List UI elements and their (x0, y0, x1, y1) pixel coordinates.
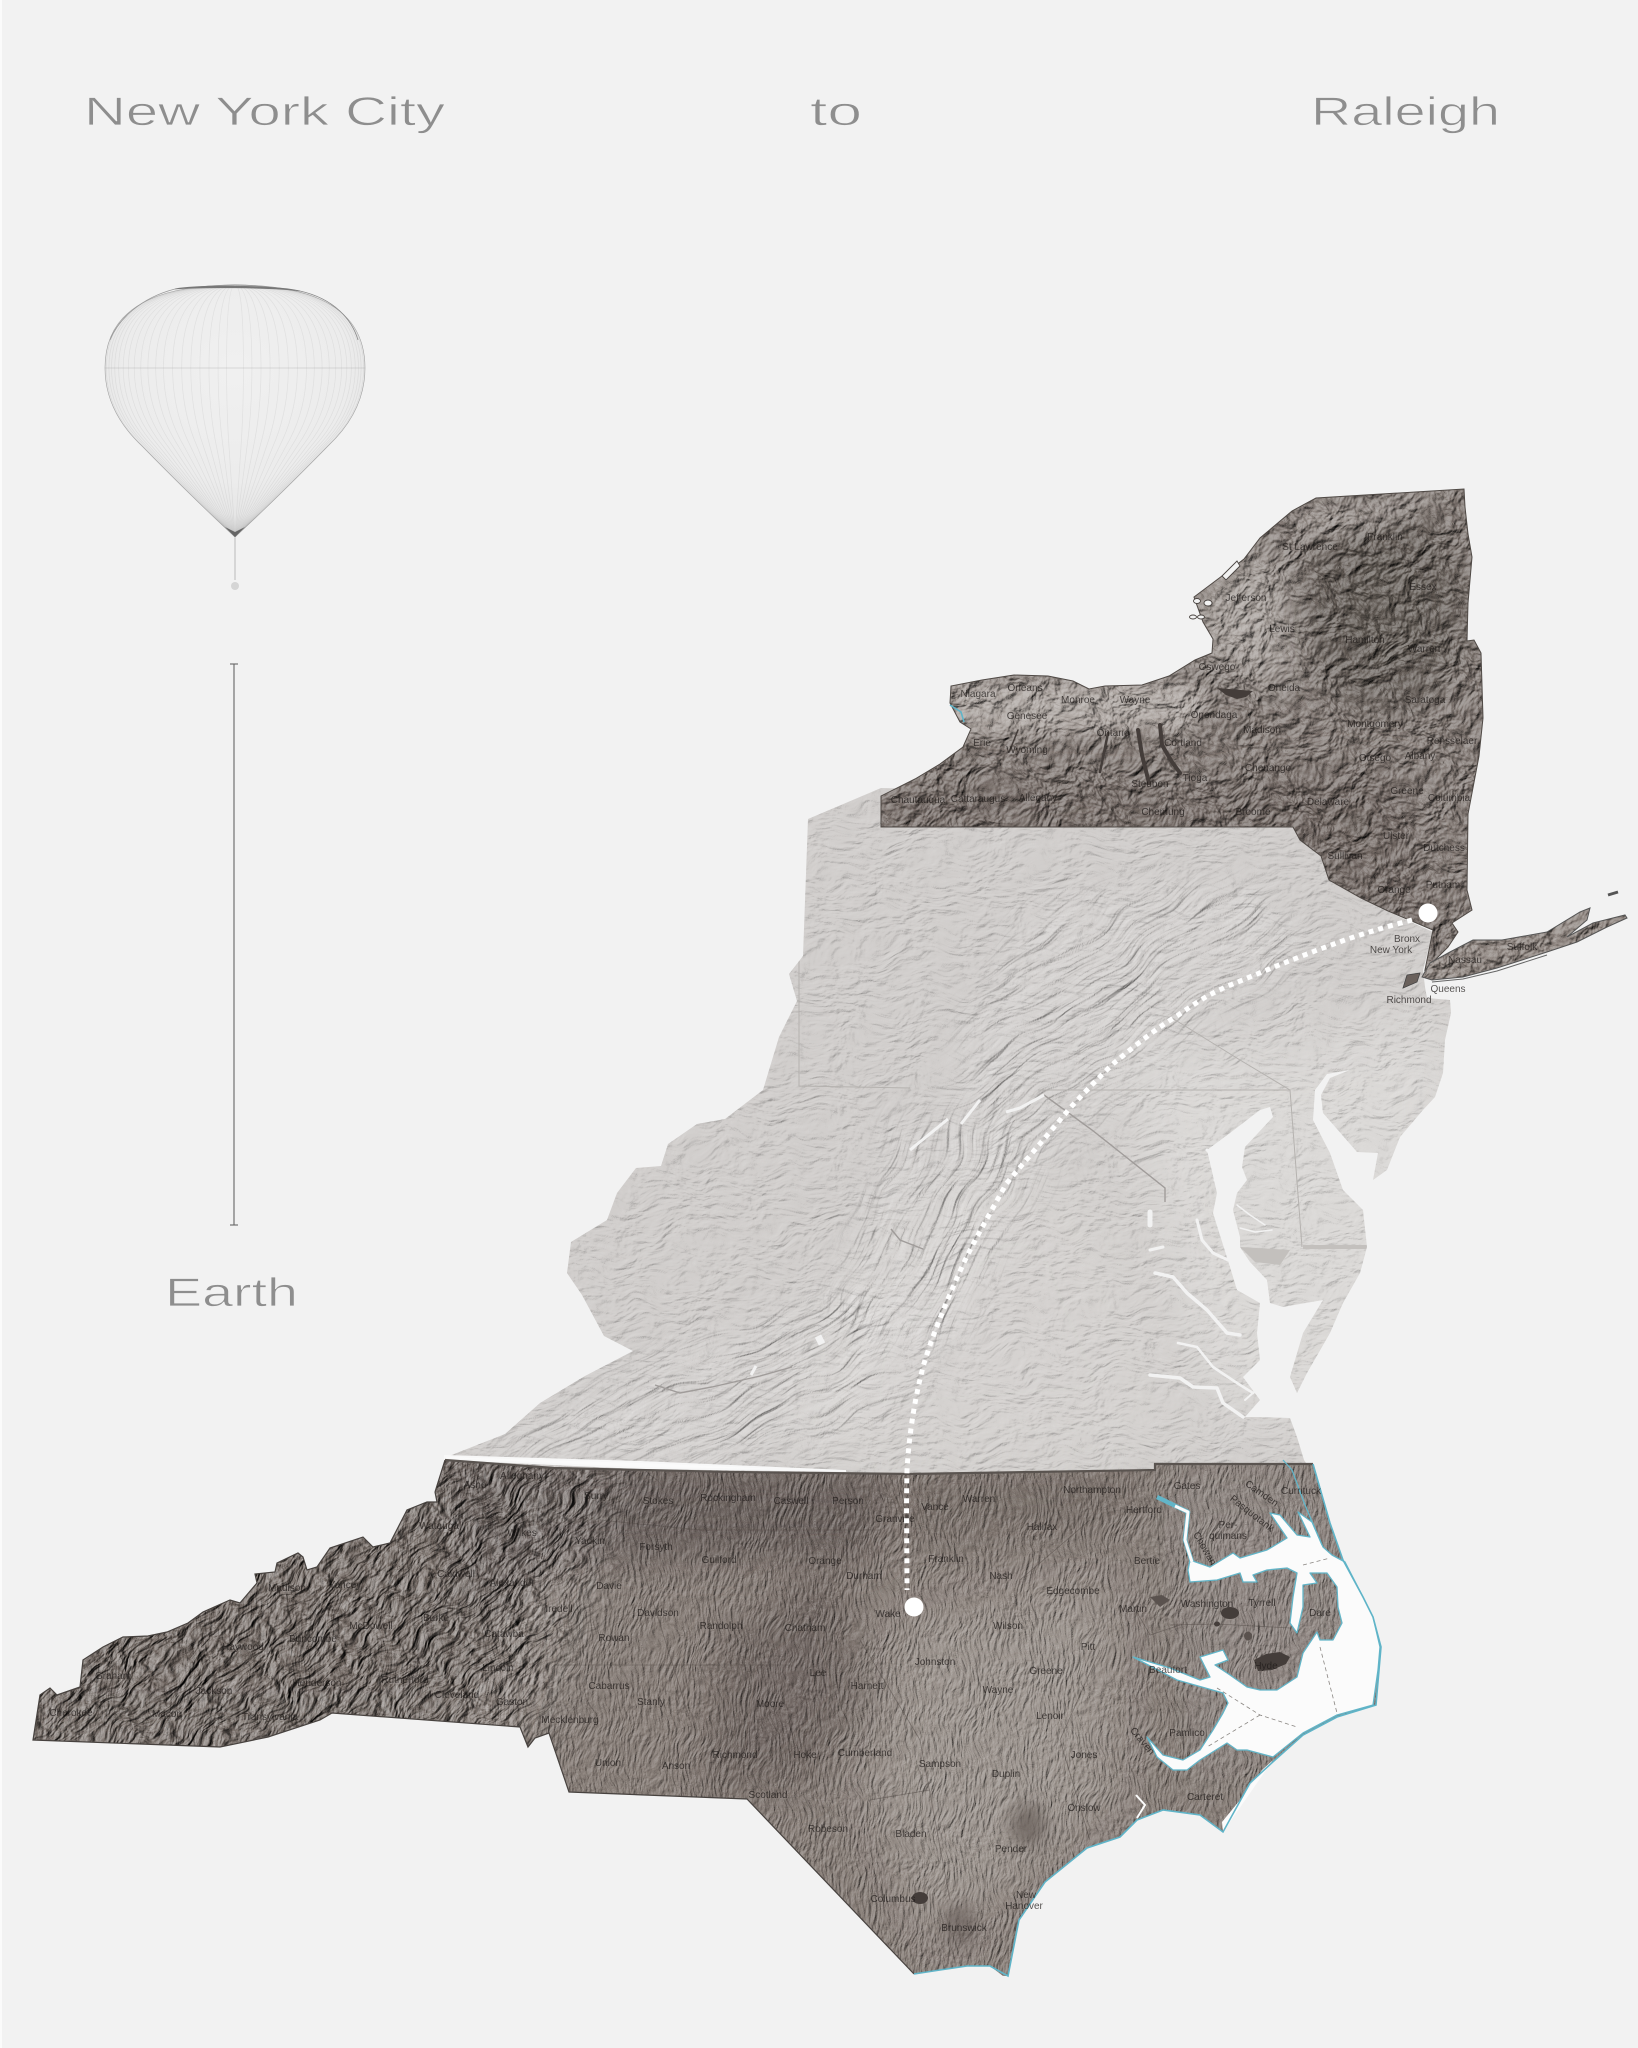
county labels: North Carolina: Ashe (464, 1480, 487, 1491)
county labels: North Carolina: Dare (1309, 1608, 1331, 1619)
county labels: North Carolina: Haywood (222, 1642, 264, 1653)
county labels: New York: Warren (1408, 644, 1440, 655)
county labels: New York: Columbia (1428, 793, 1471, 804)
county labels: New York: Allegany (1019, 793, 1057, 804)
county labels: North Carolina: Pasquotank (1227, 1493, 1277, 1535)
county labels: New York: Bronx (1394, 934, 1420, 945)
light highlights along ridges (751, 1095, 1044, 1375)
county labels: North Carolina: Caldwell (437, 1569, 475, 1580)
title: origin city: New York City (84, 90, 445, 134)
county labels: New York: Ulster (1383, 831, 1410, 842)
county labels: New York: New York (1370, 945, 1413, 956)
county labels: North Carolina: quimans (1209, 1531, 1247, 1542)
outline: state border (33, 1492, 914, 1974)
county labels: New York: Nassau (1448, 955, 1482, 966)
county labels: North Carolina: Jones (1071, 1750, 1097, 1761)
county labels: North Carolina: Wilson (993, 1621, 1023, 1632)
county labels: North Carolina: Alexander (489, 1578, 535, 1589)
county labels: North Carolina: Orange (808, 1556, 842, 1567)
county labels: New York: Queens (1430, 984, 1466, 995)
county labels: North Carolina: Jackson (196, 1686, 232, 1697)
county labels: New York: Orleans (1007, 683, 1043, 694)
county labels: New York: Richmond (1386, 995, 1432, 1006)
county labels: North Carolina: Halifax (1027, 1522, 1057, 1533)
county labels: North Carolina: Iredell (545, 1604, 573, 1615)
county labels: North Carolina: Johnston (915, 1657, 955, 1668)
county labels: New York: Chautauqua (891, 795, 946, 806)
county labels: North Carolina: Chatham (785, 1623, 825, 1634)
map: North Carolina (32, 1458, 1382, 1978)
icon: high-altitude balloon (105, 285, 365, 590)
county labels: New York: Rensselaer (1427, 736, 1478, 747)
county labels: North Carolina: Stokes (643, 1496, 673, 1507)
water: Albemarle and Pamlico Sounds (1133, 1512, 1380, 1770)
county labels: New York: Franklin (1367, 532, 1403, 543)
county labels: North Carolina: Rockingham (700, 1493, 756, 1504)
county labels: New York: Delaware (1307, 797, 1350, 808)
county labels: North Carolina: Craven (1127, 1726, 1156, 1757)
route: dotted flight path from New York City to Raleigh (907, 920, 1412, 1590)
altitude scale line (230, 664, 238, 1225)
county labels: North Carolina: Hoke (793, 1750, 817, 1761)
county labels: North Carolina: Davidson (637, 1608, 679, 1619)
county labels: North Carolina: Yadkin (575, 1536, 605, 1547)
shoreline outline (881, 489, 1483, 970)
county labels: North Carolina: Moore (756, 1699, 785, 1710)
county labels: New York: Genesee (1007, 711, 1048, 722)
county labels: New York: Otsego (1359, 753, 1392, 764)
county labels: North Carolina: Scotland (749, 1790, 787, 1801)
water: Core Sound (1222, 1760, 1273, 1832)
county labels: New York: Onondaga (1191, 710, 1238, 721)
county labels: North Carolina: Burke (423, 1613, 449, 1624)
county labels: New York: Dutchess (1423, 843, 1465, 854)
county labels: New York: Tioga (1183, 773, 1208, 784)
state boundaries (799, 960, 1302, 1247)
county labels: North Carolina: Franklin (928, 1554, 964, 1565)
county labels: North Carolina: Buncombe (289, 1634, 337, 1645)
lakes (1217, 688, 1253, 699)
county labels: North Carolina: New (1016, 1890, 1037, 1901)
county labels: New York: Essex (1409, 582, 1437, 593)
county labels: North Carolina: Mecklenburg (541, 1715, 599, 1726)
county labels: New York: Broome (1235, 807, 1271, 818)
water: Chowan River (1157, 1460, 1322, 1562)
county labels: North Carolina: Anson (662, 1761, 690, 1772)
county labels: North Carolina: Richmond (712, 1750, 758, 1761)
county labels: North Carolina: Wayne (983, 1685, 1014, 1696)
county labels: North Carolina: Davie (596, 1581, 622, 1592)
county labels: North Carolina: Greene (1029, 1666, 1063, 1677)
county labels: North Carolina: Gates (1174, 1481, 1200, 1492)
county labels: North Carolina: Vance (921, 1502, 949, 1513)
county labels: North Carolina: Guilford (701, 1555, 737, 1566)
Thousand Islands (1190, 561, 1240, 619)
white crescent above North Carolina (445, 1456, 846, 1471)
river lines (655, 1095, 1165, 1393)
county labels: New York: Suffolk (1507, 942, 1538, 953)
county labels: New York: Orange (1377, 885, 1411, 896)
county labels: North Carolina: Hertford (1126, 1505, 1162, 1516)
county labels: North Carolina: Hanover (1005, 1901, 1044, 1912)
county labels: North Carolina: Macon (152, 1709, 182, 1720)
county labels: North Carolina: Camden (1243, 1479, 1280, 1509)
county labels: North Carolina: Wilkes (507, 1528, 537, 1539)
map: New York State (870, 480, 1490, 1000)
water: Chesapeake Bay (1207, 1107, 1323, 1420)
county labels: North Carolina: Madison (268, 1583, 306, 1594)
county labels: New York: Niagara (960, 689, 996, 700)
county labels: New York: Cortland (1164, 738, 1202, 749)
county labels: North Carolina: Caswell (773, 1496, 809, 1507)
county labels: North Carolina: Person (832, 1496, 864, 1507)
county labels: North Carolina: Bertie (1134, 1556, 1160, 1567)
county labels: New York: Albany (1405, 751, 1435, 762)
dashed county lines in the sound (1207, 1558, 1337, 1747)
county labels: North Carolina: Granville (875, 1514, 915, 1525)
county labels: North Carolina: Martin (1119, 1604, 1147, 1615)
county labels: North Carolina: Duplin (992, 1769, 1020, 1780)
county labels: North Carolina: Lincoln (482, 1663, 514, 1674)
county labels: North Carolina: Rowan (598, 1633, 630, 1644)
county labels: North Carolina: Pender (995, 1844, 1028, 1855)
county labels: North Carolina: Robeson (808, 1824, 848, 1835)
county labels: North Carolina (49, 1471, 1331, 1934)
county labels: New York: Sullivan (1327, 851, 1363, 862)
county labels: New York: Monroe (1061, 695, 1095, 706)
county labels: North Carolina: Graham (95, 1671, 131, 1682)
county labels: North Carolina: Carteret (1187, 1792, 1223, 1803)
county labels: New York: Cattaraugus (951, 794, 1005, 805)
county labels: North Carolina: Yancey (329, 1580, 361, 1591)
county labels: New York: Oswego (1199, 662, 1236, 673)
title: connector word: to (810, 90, 862, 134)
county labels: North Carolina: Cherokee (49, 1708, 93, 1719)
county labels: New York: Erie (973, 738, 991, 749)
map: light relief of the states between New York and North Carolina (451, 788, 1451, 1473)
county labels: North Carolina: Forsyth (639, 1542, 673, 1553)
marker: Raleigh (904, 1598, 924, 1616)
map: Long Island (1403, 892, 1630, 990)
swamp lakes (1221, 1607, 1239, 1619)
county labels: North Carolina: Chowan (1190, 1530, 1218, 1567)
county labels: New York: Oneida (1268, 683, 1301, 694)
county labels: North Carolina: Surry (584, 1491, 608, 1502)
county labels: New York: Madison (1243, 725, 1281, 736)
county labels: North Carolina: Bladen (895, 1829, 927, 1840)
county labels: North Carolina: Currituck (1281, 1486, 1322, 1497)
county boundaries (555, 1470, 1290, 1900)
county labels: North Carolina: Northampton (1063, 1485, 1121, 1496)
county labels: New York: Lewis (1269, 624, 1295, 635)
county labels: North Carolina: Randolph (700, 1621, 742, 1632)
county labels: New York: Wayne (1120, 695, 1151, 706)
county labels: North Carolina: Henderson (293, 1678, 341, 1689)
county labels: New York: Ontario (1097, 728, 1130, 739)
county labels: North Carolina: Nash (989, 1571, 1013, 1582)
county labels: New York: Jefferson (1226, 593, 1266, 604)
county labels: New York: Wyoming (1006, 745, 1048, 756)
county labels: North Carolina: Cumberland (838, 1748, 892, 1759)
county labels: North Carolina: Alleghany (500, 1471, 544, 1482)
county labels: New York: St Lawrence (1282, 542, 1338, 553)
county labels: New York: Chenango (1245, 763, 1292, 774)
county labels: New York: Hamilton (1345, 635, 1385, 646)
water: New River inlet (1136, 1795, 1145, 1818)
county labels: North Carolina: Cabarrus (588, 1681, 630, 1692)
county labels: New York: Steuben (1131, 779, 1169, 790)
county labels: North Carolina: Tyrrell (1248, 1598, 1276, 1609)
county labels: North Carolina: Rutherford (381, 1675, 429, 1686)
county labels: North Carolina: Wake (875, 1609, 901, 1620)
county labels: North Carolina: Stanly (637, 1697, 665, 1708)
county labels: New York: Saratoga (1405, 695, 1446, 706)
county labels: North Carolina: Catawba (484, 1629, 524, 1640)
county labels: North Carolina: Hyde (1254, 1661, 1278, 1672)
label: Earth: Earth (165, 1271, 298, 1315)
county labels: North Carolina: Sampson (919, 1759, 961, 1770)
county labels: New York: Montgomery (1347, 719, 1403, 730)
county labels: North Carolina: McDowell (349, 1621, 393, 1632)
county labels: North Carolina: Transylvania (242, 1712, 299, 1723)
county labels: North Carolina: Lenoir (1036, 1711, 1065, 1722)
county labels: New York: Greene (1390, 786, 1424, 797)
county labels: North Carolina: Harnett (851, 1681, 884, 1692)
county labels: North Carolina: Union (595, 1758, 621, 1769)
county labels: North Carolina: Pamlico (1169, 1728, 1205, 1739)
county labels: North Carolina: Watauga (419, 1521, 459, 1532)
county labels: North Carolina: Edgecombe (1046, 1586, 1100, 1597)
county labels: North Carolina: Lee (810, 1668, 827, 1679)
county labels: North Carolina: Per- (1219, 1520, 1237, 1531)
county labels: North Carolina: Pitt (1081, 1642, 1095, 1653)
county labels: North Carolina: Brunswick (941, 1923, 988, 1934)
county labels: North Carolina: Gaston (496, 1697, 528, 1708)
county labels: North Carolina: Durham (846, 1571, 882, 1582)
outline: Atlantic coast (914, 1464, 1381, 1976)
title: destination city: Raleigh (1311, 90, 1500, 134)
county labels: North Carolina: Columbus (870, 1894, 916, 1905)
county labels: New York: Putnam (1426, 880, 1460, 891)
Niagara river (950, 705, 964, 722)
county labels: North Carolina: Onslow (1067, 1803, 1101, 1814)
marker: New York City (1418, 904, 1438, 922)
county labels: New York: Chemung (1141, 807, 1185, 818)
county labels: North Carolina: Cleveland (435, 1690, 479, 1701)
county labels: North Carolina: Warren (963, 1494, 995, 1505)
water: tidal rivers (1150, 1150, 1272, 1417)
county labels: New York (891, 532, 1538, 1006)
county labels: North Carolina: Beaufort (1149, 1665, 1187, 1676)
county labels: North Carolina: Washington (1181, 1599, 1233, 1610)
